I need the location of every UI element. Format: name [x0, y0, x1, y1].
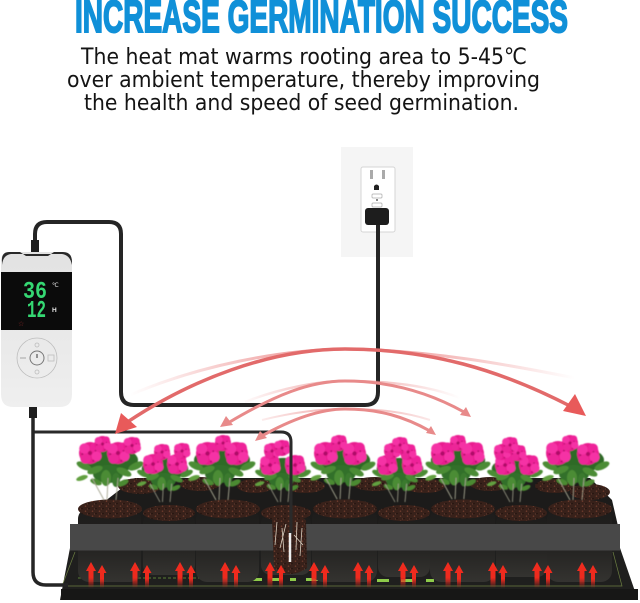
back row of grow bags — [100, 477, 618, 526]
grey band across bags — [70, 524, 620, 550]
large heat wave arrow — [115, 349, 586, 434]
plant 6 — [371, 437, 429, 502]
display panel: 36 — [23, 279, 47, 306]
display panel: 12 — [27, 298, 46, 325]
power cable from outlet to controller — [35, 222, 378, 405]
sensor probe cable — [33, 432, 291, 562]
lower heat wave arrow — [255, 409, 436, 441]
middle heat wave arrow — [220, 381, 471, 427]
wall outlet — [341, 147, 413, 257]
cable to heat mat — [33, 408, 68, 585]
description text: over ambient temperature, thereby improving — [67, 67, 540, 93]
temperature controller — [1, 240, 72, 418]
rising heat arrows — [86, 562, 598, 588]
control dial — [17, 338, 57, 378]
plant 1 — [75, 436, 145, 500]
display panel: H — [52, 307, 57, 314]
plant 8 — [486, 437, 544, 502]
description text: the health and speed of seed germination. — [84, 90, 519, 116]
description text — [67, 44, 540, 116]
plant 4 — [254, 440, 312, 502]
display panel — [1, 272, 72, 330]
description text: The heat mat warms rooting area to 5-45℃ — [80, 44, 527, 70]
plant 9 — [541, 435, 611, 500]
display panel: ℃ — [52, 283, 59, 289]
flowering plants — [75, 435, 611, 502]
plant 2 — [136, 443, 194, 502]
plant 5 — [309, 435, 377, 499]
plant 3 — [187, 435, 257, 500]
cutaway soil and roots — [272, 516, 307, 574]
front row of grow bags — [78, 500, 612, 582]
heat mat — [60, 548, 638, 600]
plant 7 — [424, 435, 492, 499]
display panel: ☆ — [18, 320, 24, 328]
